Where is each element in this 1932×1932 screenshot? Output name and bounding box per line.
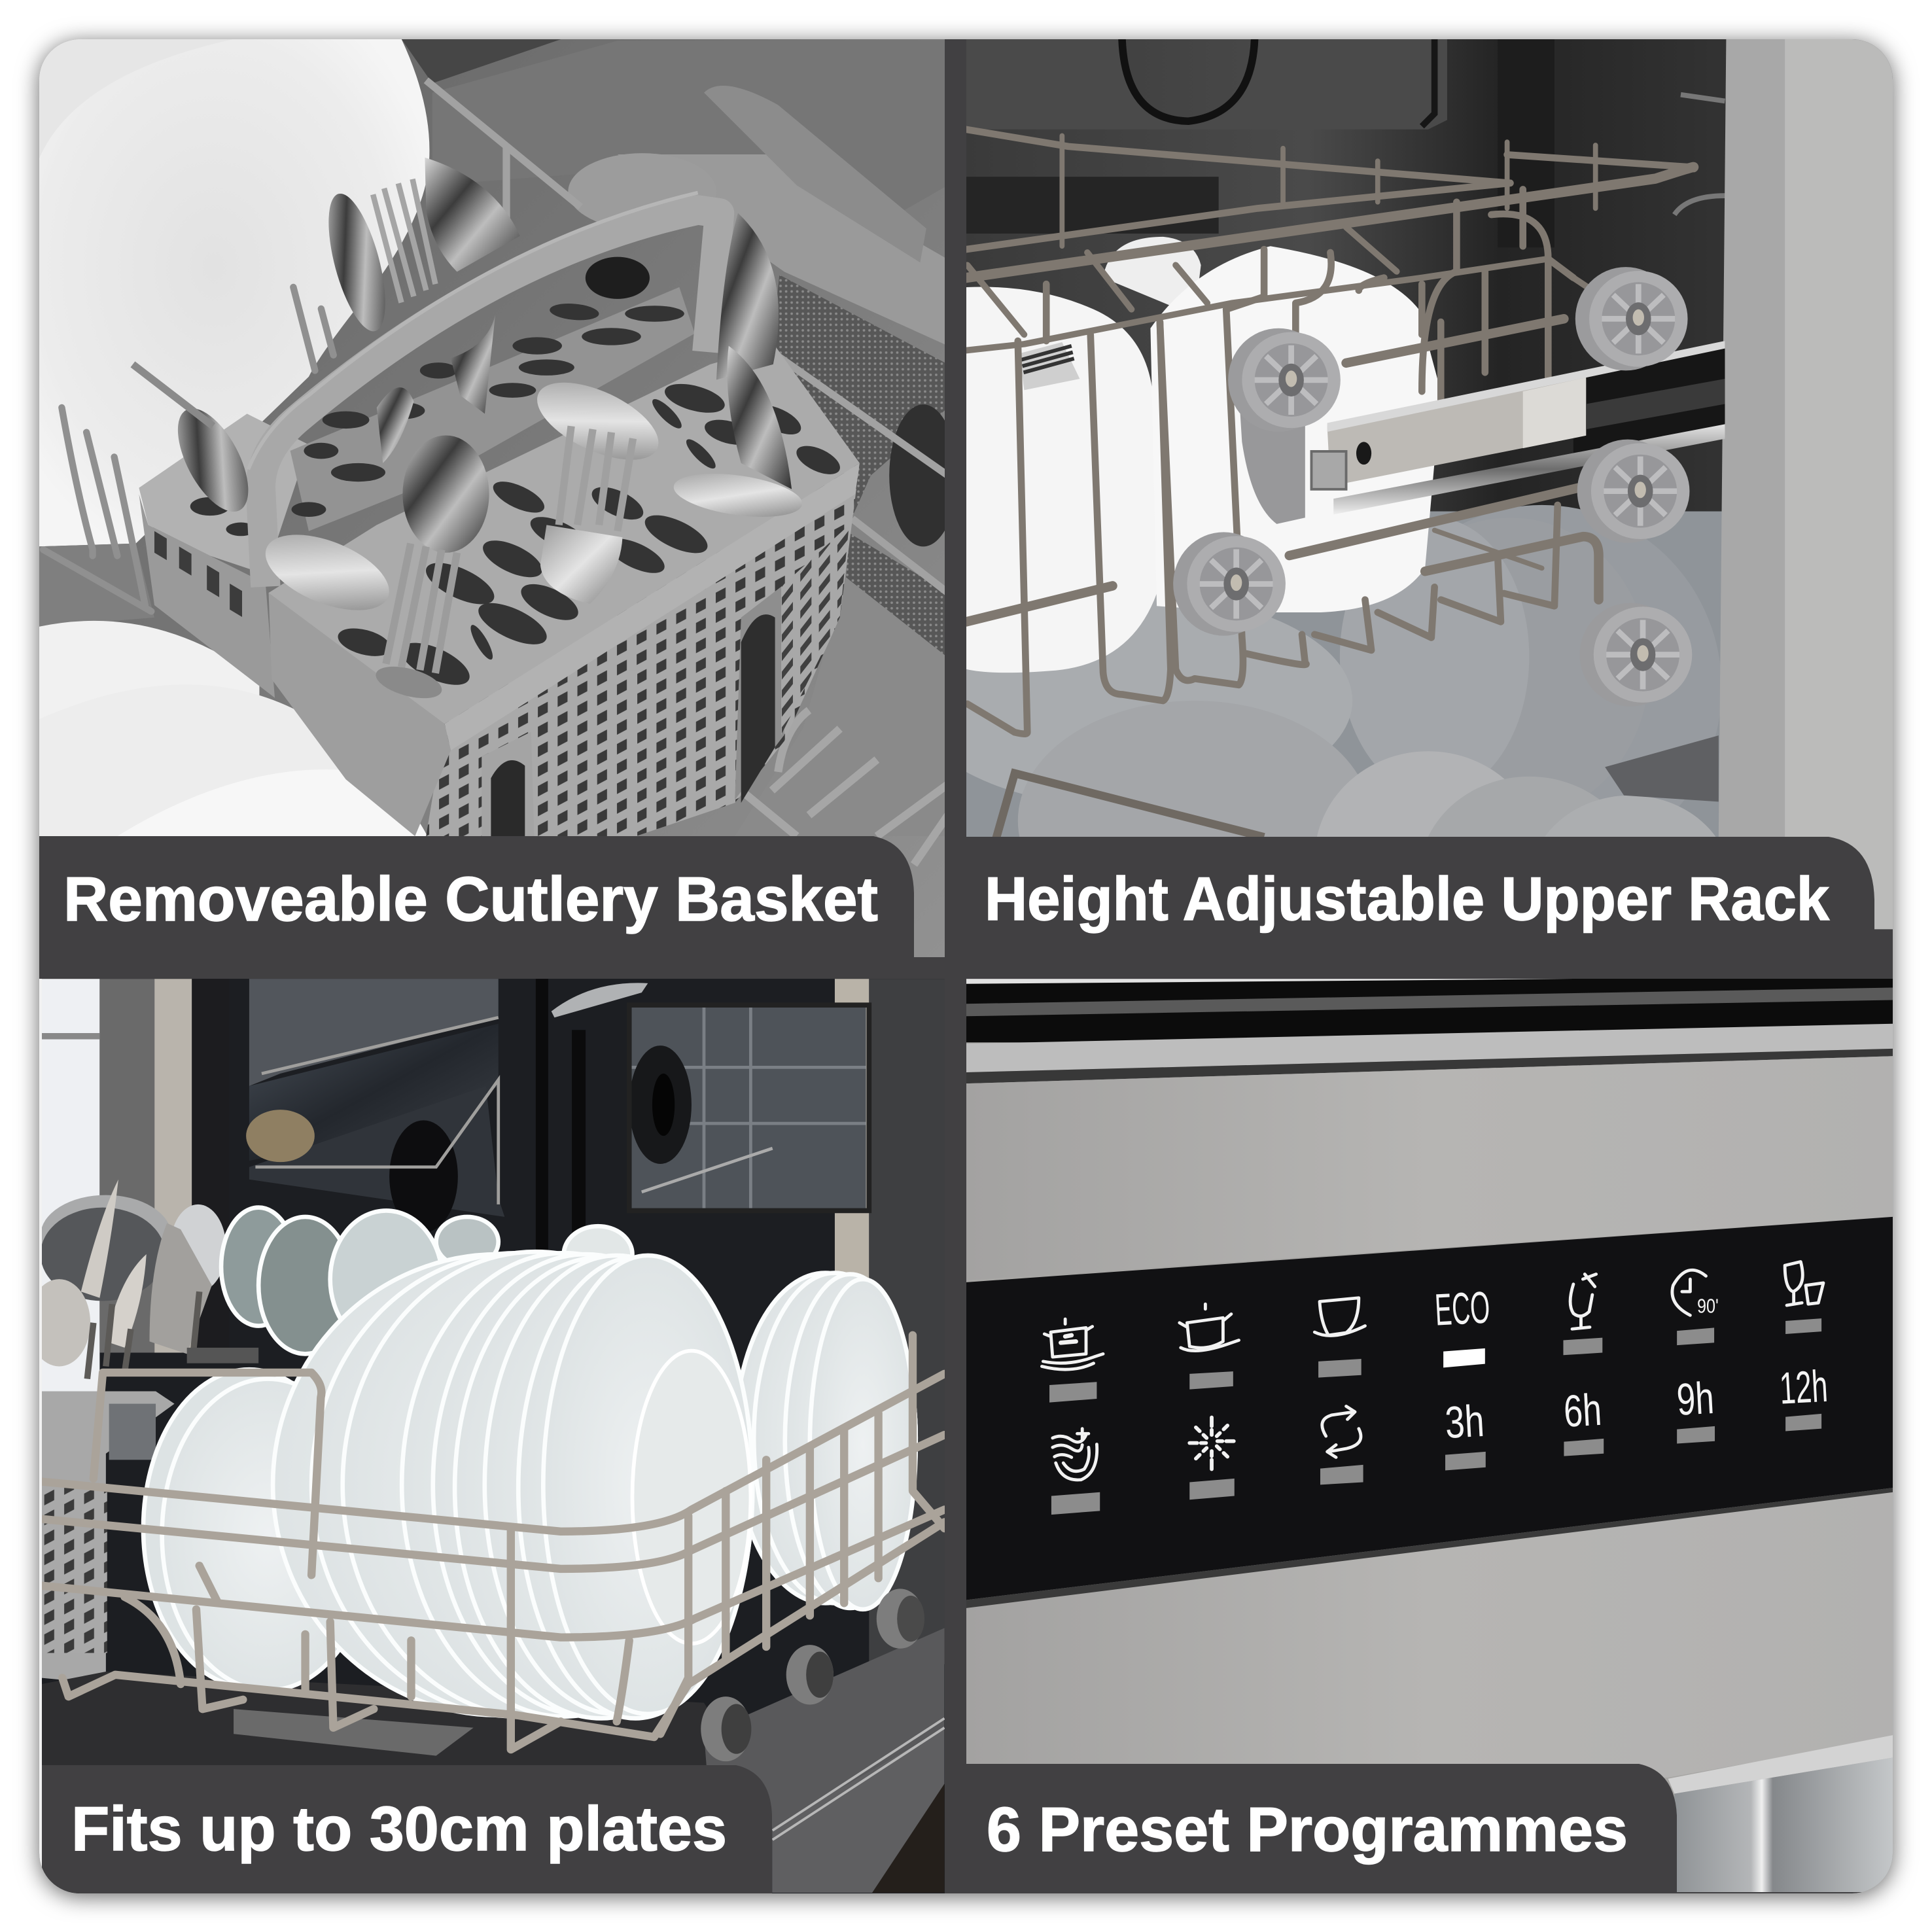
programme labels: 6h xyxy=(1562,1384,1603,1437)
plates in lower rack xyxy=(1498,505,1581,512)
caption bar: height adjustable upper rack xyxy=(945,837,1893,979)
cutlery xyxy=(133,158,805,705)
door reflections xyxy=(246,979,869,1290)
rack wheels xyxy=(1173,267,1692,707)
plate: large xyxy=(39,39,429,546)
panel: fits up to 30cm plates photo xyxy=(28,974,953,1908)
programme labels: 9h xyxy=(1676,1373,1715,1425)
white cups xyxy=(966,287,1157,673)
floor and door xyxy=(42,1672,748,1771)
basket xyxy=(42,1392,175,1684)
wire rack xyxy=(966,130,1694,734)
cutlery xyxy=(28,1180,226,1379)
wire rack xyxy=(42,1335,945,1749)
programme labels: 90' xyxy=(1697,1295,1719,1318)
caption bar: 6 preset programmes xyxy=(945,1764,1677,1893)
caption text: Height Adjustable Upper Rack xyxy=(985,864,1830,933)
programme icons xyxy=(1042,1261,1823,1480)
plates xyxy=(143,1208,916,1718)
ECO lit indicator xyxy=(1443,1348,1485,1367)
caption text: Fits up to 30cm plates xyxy=(71,1794,727,1864)
programme labels: 12h xyxy=(1778,1361,1829,1413)
handle xyxy=(260,210,720,587)
caption text: 6 Preset Programmes xyxy=(987,1795,1628,1865)
programme labels: 3h xyxy=(1444,1396,1486,1448)
panel: height adjustable upper rack photo xyxy=(966,39,1893,929)
caption bar: fits up to 30cm plates xyxy=(42,1765,772,1893)
rack wheels xyxy=(701,1589,924,1761)
caption text: Removeable Cutlery Basket xyxy=(63,864,878,934)
spray arm xyxy=(704,86,926,262)
caption bar: removable cutlery basket xyxy=(39,836,914,978)
panel: removable cutlery basket photo xyxy=(39,39,945,957)
door side xyxy=(1719,39,1788,837)
slide rail xyxy=(1327,341,1725,514)
basket deck holes xyxy=(190,302,844,694)
indicator bars xyxy=(1049,1318,1821,1515)
programme labels: ECO xyxy=(1433,1282,1491,1335)
programme labels xyxy=(1433,1282,1829,1448)
control display xyxy=(966,1217,1893,1608)
rack wires bottom right xyxy=(741,707,945,867)
basket xyxy=(139,287,860,836)
plates: lower stack xyxy=(39,620,259,719)
panel: 6 preset programmes control panel photo xyxy=(961,974,1908,1908)
